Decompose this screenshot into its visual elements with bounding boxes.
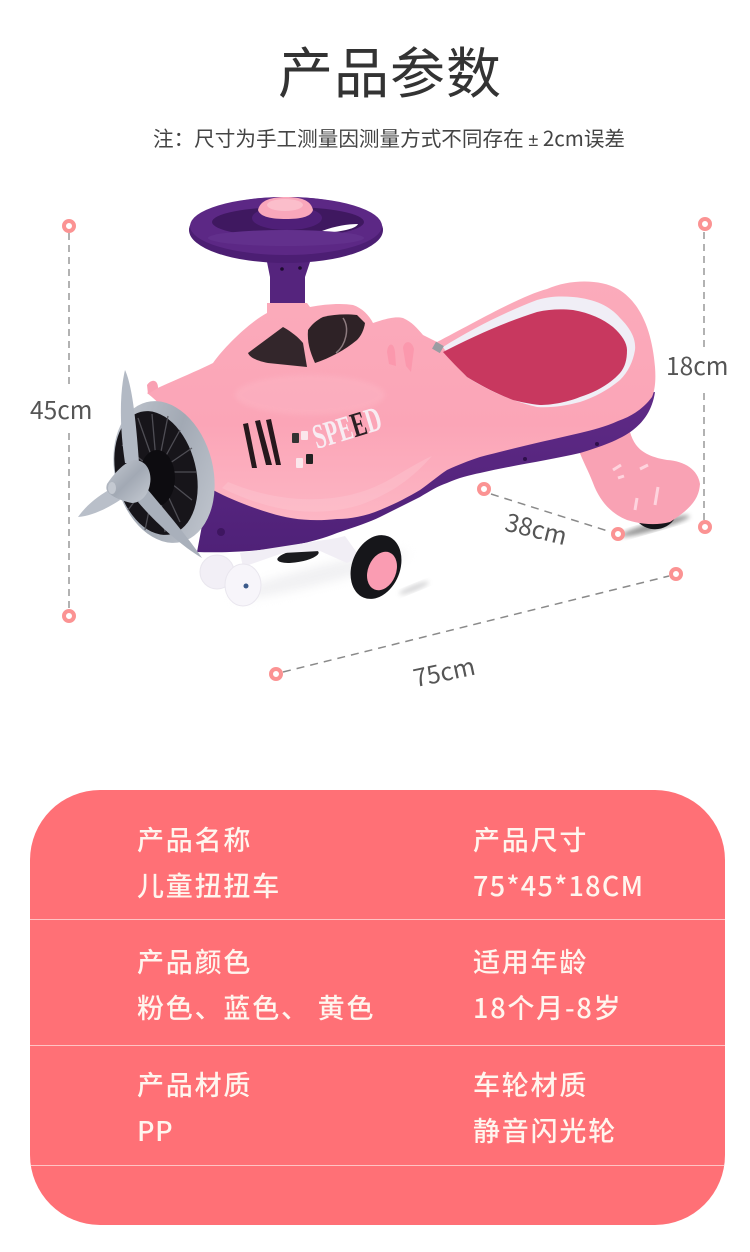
- vents and decals: [243, 400, 386, 468]
- spec: product name: 儿童扭扭车: [137, 865, 281, 904]
- spec: product colours: [137, 941, 375, 1026]
- spec: wheel material: 静音闪光轮: [473, 1110, 617, 1149]
- spec: material: 产品材质: [137, 1064, 252, 1103]
- label: 45cm: 45cm: [30, 392, 92, 427]
- spec: product size: 75*45*18CM: [473, 865, 644, 904]
- title: 产品参数: [278, 29, 502, 109]
- spec: product size: [473, 819, 644, 904]
- spec: wheel material: 车轮材质: [473, 1064, 588, 1103]
- spec: age range: [473, 941, 622, 1026]
- dimension: 45cm: [64, 221, 74, 621]
- spec: material: PP: [137, 1110, 173, 1149]
- spec: product name: [137, 819, 281, 904]
- seat: [432, 296, 635, 407]
- rear caster arm: [578, 432, 700, 529]
- purple underside: [197, 392, 655, 552]
- label: 18cm: 18cm: [666, 348, 728, 383]
- label: 38cm: 38cm: [502, 504, 571, 553]
- spec: wheel material: [473, 1064, 617, 1149]
- dimension: 38cm: [479, 484, 623, 539]
- panel: product specifications: [30, 790, 725, 1225]
- steering wheel: [189, 197, 383, 263]
- cockpit windows: [248, 314, 365, 367]
- spec: product name: 产品名称: [137, 819, 252, 858]
- vents and decals: SPEED: [308, 400, 386, 457]
- spec: material: [137, 1064, 252, 1149]
- ground shadows: [230, 512, 691, 606]
- spec: product colours: 粉色、蓝色、 黄色: [137, 987, 375, 1026]
- dimension: 18cm: [700, 219, 710, 532]
- engine with silver ring: [99, 390, 229, 554]
- spec: age range: 18个月-8岁: [473, 987, 622, 1026]
- dimension: 75cm: [271, 569, 681, 679]
- label: 75cm: 75cm: [410, 648, 478, 695]
- steering column: [267, 262, 310, 307]
- spec: product colours: 产品颜色: [137, 941, 252, 980]
- product illustration with dimensions: [62, 197, 712, 681]
- pink body: [147, 282, 655, 520]
- note: 注：尺寸为手工测量因测量方式不同存在 ± 2cm误差: [153, 122, 625, 152]
- spec: product size: 产品尺寸: [473, 819, 588, 858]
- spec: age range: 适用年龄: [473, 941, 588, 980]
- front wheel assembly: [200, 527, 411, 607]
- propeller: [78, 370, 202, 558]
